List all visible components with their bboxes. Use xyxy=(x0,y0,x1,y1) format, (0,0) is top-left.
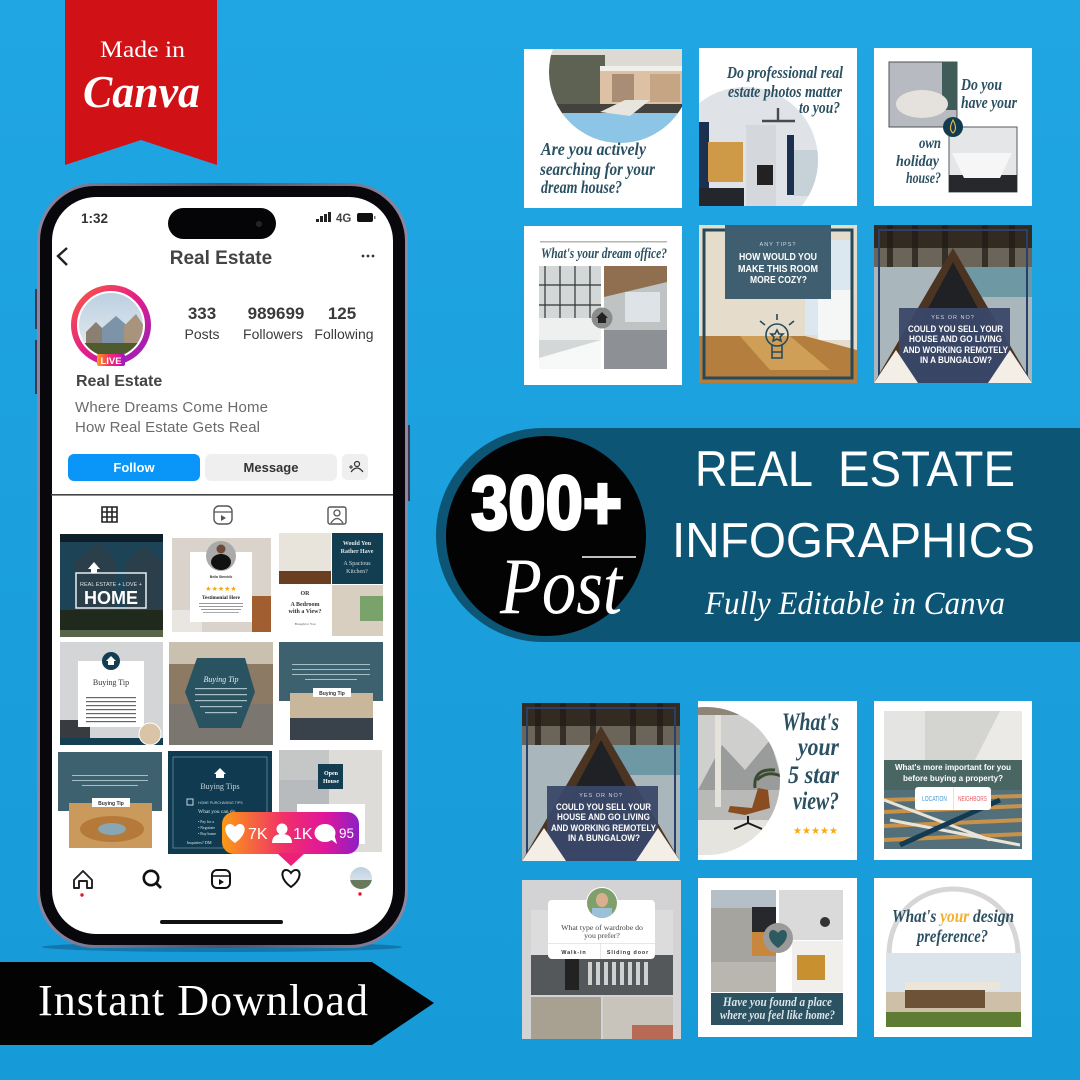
template: dream office xyxy=(524,226,682,385)
template: bungalow repeat: COULD YOU SELL YOUR xyxy=(556,802,651,813)
post grid xyxy=(58,533,383,854)
icon: lightbulb xyxy=(760,314,794,358)
template: professional photos: to you? xyxy=(799,98,840,117)
profile bio: Real Estate xyxy=(76,373,162,390)
template: 5 star view: ★★★★★ xyxy=(793,826,838,837)
banner: 300+ post xyxy=(436,428,1080,642)
template: dream house: searching for your xyxy=(539,159,655,179)
profile stats xyxy=(184,304,374,342)
arrow banner: Instant Download: Instant Download xyxy=(38,976,368,1025)
post: home: REAL ESTATE + LOVE + xyxy=(80,582,142,588)
ribbon: Made in Canva: Canva xyxy=(83,66,200,117)
profile buttons: Message xyxy=(244,460,298,475)
post: testimonial xyxy=(172,538,271,632)
post: open house xyxy=(279,750,382,852)
template: design preference: What's your design xyxy=(892,906,1014,926)
template: holiday house xyxy=(874,48,1032,206)
post: buying tips navy: • Pay for a xyxy=(198,820,214,824)
banner title xyxy=(672,441,1035,568)
post: would you rather xyxy=(279,533,383,636)
template: bungalow repeat xyxy=(522,703,680,861)
post: buying tips navy xyxy=(168,751,272,854)
post: buying tips navy: Inquiries? DM xyxy=(187,840,212,845)
template: cozy room: MORE COZY? xyxy=(750,275,807,286)
template: 5 star view: What's xyxy=(782,709,839,736)
template: dream office: What's your dream office? xyxy=(541,246,667,262)
template: feel like home xyxy=(698,878,857,1037)
post: buying tips navy: What you can do... xyxy=(198,809,240,815)
ribbon: Made in Canva: Made in xyxy=(100,37,186,62)
template: dream house: dream house? xyxy=(541,177,622,197)
post: buying tip 3: Buying Tip xyxy=(319,691,345,697)
template: holiday house: house? xyxy=(906,170,941,187)
template: cozy room: HOW WOULD YOU xyxy=(739,252,817,263)
post: buying tip 2 xyxy=(169,642,273,745)
post: buying tip 3 xyxy=(279,642,383,740)
profile stats: Followers xyxy=(243,326,303,342)
template: location or neighbors: before buying a property? xyxy=(903,774,1003,783)
profile buttons xyxy=(68,454,368,481)
post: testimonial: Testimonial Here xyxy=(202,595,241,601)
template: wardrobe: Sliding door xyxy=(607,950,649,956)
post: buying tip 4 xyxy=(58,752,162,848)
template: 5 star view: your xyxy=(795,734,839,761)
post: would you rather: A Spacious xyxy=(343,561,371,567)
template: holiday house: own xyxy=(919,135,941,152)
template: feel like home: Have you found a place xyxy=(722,995,832,1009)
ribbon: Made in Canva xyxy=(65,0,217,165)
template: location or neighbors: NEIGHBORS xyxy=(958,796,987,803)
template: location or neighbors: What's more important for you xyxy=(895,763,1011,772)
profile header: Real Estate xyxy=(170,248,272,269)
template: holiday house: holiday xyxy=(896,153,940,170)
post: home: HOME xyxy=(84,588,138,608)
post: buying tips navy: HOME PURCHASING TIPS xyxy=(198,801,243,805)
template: holiday house: have your xyxy=(961,93,1017,112)
template: cozy room: MAKE THIS ROOM xyxy=(738,264,818,275)
post: open house: Open xyxy=(324,771,339,777)
banner title: REAL xyxy=(695,441,813,497)
banner title: INFOGRAPHICS xyxy=(672,514,1035,568)
template: 5 star view: 5 star xyxy=(788,762,839,789)
template: bungalow repeat: HOUSE AND GO LIVING xyxy=(557,812,650,823)
post: home xyxy=(60,534,163,637)
template: bungalow: HOUSE AND GO LIVING xyxy=(909,334,1002,345)
status bar: 4G xyxy=(336,213,351,225)
post: would you rather: Rather Have xyxy=(341,549,374,555)
status bar xyxy=(81,208,376,239)
profile stats: 333 xyxy=(188,304,216,323)
template: 5 star view: view? xyxy=(793,788,839,815)
badge circle: Post xyxy=(499,543,624,631)
post: buying tips navy: • Negotiate xyxy=(198,826,215,830)
phone mockup xyxy=(35,183,410,952)
notification bubble xyxy=(222,812,359,866)
post: buying tips navy: • Buy home xyxy=(198,832,216,836)
profile bio: How Real Estate Gets Real xyxy=(75,419,260,436)
post: open house: House xyxy=(323,779,339,785)
post: would you rather: OR xyxy=(300,591,310,597)
notification bubble: 1K xyxy=(293,826,313,843)
template: location or neighbors xyxy=(874,701,1032,860)
template: bungalow repeat: IN A BUNGALOW? xyxy=(568,833,640,844)
template: professional photos: Do professional real xyxy=(726,63,843,82)
template: feel like home: where you feel like home? xyxy=(720,1008,835,1022)
post: would you rather: with a View? xyxy=(288,609,322,615)
template: professional photos: estate photos matter xyxy=(728,82,842,101)
status bar: 1:32 xyxy=(81,211,108,226)
template: bungalow repeat: AND WORKING REMOTELY xyxy=(551,823,657,834)
template: cozy room xyxy=(699,225,857,383)
profile header xyxy=(58,248,374,269)
template: dream house xyxy=(524,49,682,208)
post: would you rather: A Bedroom xyxy=(290,602,320,608)
badge circle: 300+ xyxy=(471,461,622,546)
profile stats: Posts xyxy=(184,326,220,342)
post: buying tip 1 xyxy=(60,642,163,745)
template: wardrobe: Walk-in xyxy=(561,950,587,956)
banner title: ESTATE xyxy=(838,441,1015,497)
template: wardrobe: What type of wardrobe do xyxy=(561,923,643,932)
template: professional photos xyxy=(699,48,857,206)
post: testimonial: ★★★★★ xyxy=(205,585,237,593)
template: design preference xyxy=(874,878,1032,1037)
template: bungalow xyxy=(874,225,1032,383)
post: buying tip 4: Buying Tip xyxy=(98,801,124,807)
profile stats: 989699 xyxy=(248,304,304,323)
post: would you rather: Kitchen? xyxy=(346,569,368,575)
profile avatar: LIVE xyxy=(100,356,122,367)
arrow banner: Instant Download xyxy=(0,962,434,1045)
post: would you rather: Would You xyxy=(343,541,372,547)
template: design preference: preference? xyxy=(915,926,988,946)
post: buying tip 1: Buying Tip xyxy=(93,678,129,687)
post: buying tip 2: Buying Tip xyxy=(204,675,238,684)
profile stats: Following xyxy=(314,326,374,342)
banner background xyxy=(436,428,1080,642)
template: 5 star view xyxy=(690,700,857,860)
template: location or neighbors: LOCATION xyxy=(922,796,947,803)
template: bungalow: COULD YOU SELL YOUR xyxy=(908,324,1003,335)
phone body xyxy=(35,183,410,952)
post: would you rather: Brought to You xyxy=(295,622,316,626)
template: dream house: Are you actively xyxy=(540,139,646,159)
banner subtitle: Fully Editable in Canva xyxy=(704,586,1005,622)
template: wardrobe: you prefer? xyxy=(584,931,620,940)
notification bubble: 7K xyxy=(248,826,268,843)
template: holiday house: Do you xyxy=(960,75,1002,94)
template: bungalow: YES OR NO? xyxy=(931,315,975,321)
post: buying tips navy: Buying Tips xyxy=(200,782,240,791)
notification bubble: 95 xyxy=(339,826,354,841)
home indicator xyxy=(160,920,283,924)
profile bio xyxy=(75,373,268,436)
profile stats: 125 xyxy=(328,304,356,323)
profile bio: Where Dreams Come Home xyxy=(75,399,268,416)
profile buttons: Follow xyxy=(113,460,155,475)
bottom navigation xyxy=(74,867,372,897)
template: bungalow repeat: YES OR NO? xyxy=(579,793,623,799)
template: cozy room: ANY TIPS? xyxy=(760,242,796,248)
badge circle xyxy=(446,436,646,636)
template: bungalow: AND WORKING REMOTELY xyxy=(903,345,1009,356)
profile avatar xyxy=(74,288,148,367)
post: testimonial: Bella Sterchik xyxy=(210,575,232,579)
template: bungalow: IN A BUNGALOW? xyxy=(920,355,992,366)
tab icons xyxy=(102,506,346,524)
template: wardrobe xyxy=(522,880,681,1039)
